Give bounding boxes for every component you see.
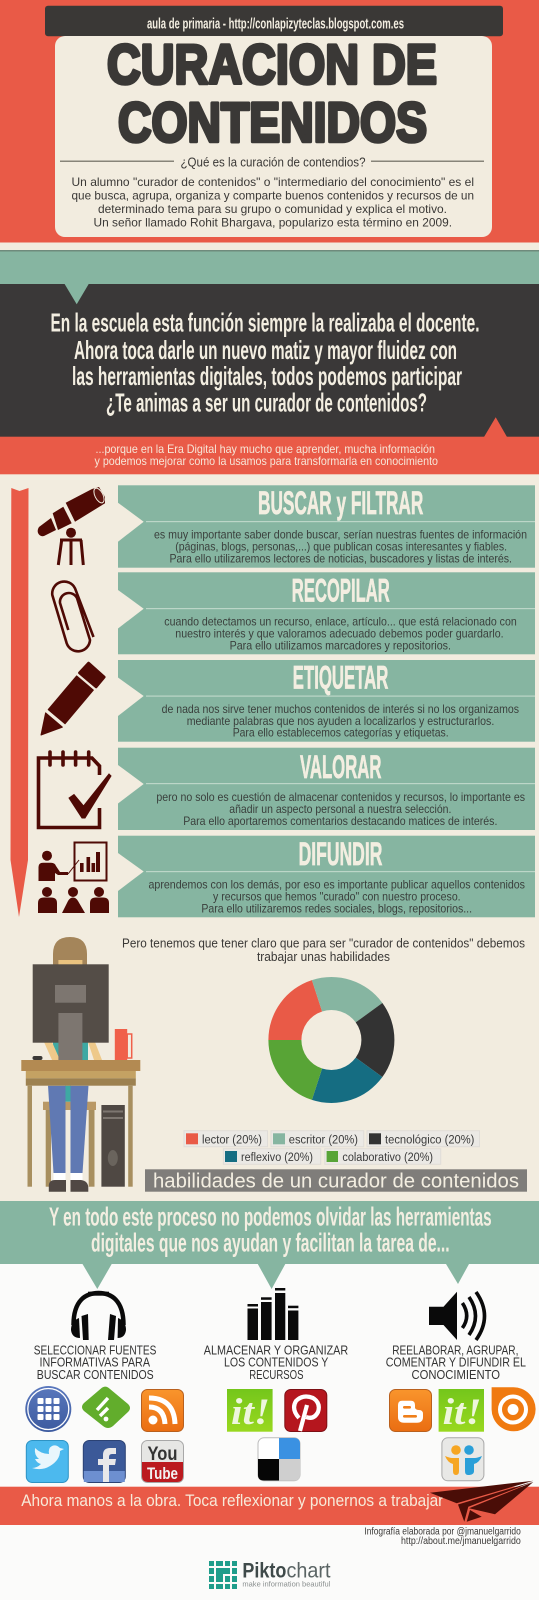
- panel: closing banner: [0, 1481, 539, 1525]
- caption: INFORMATIVAS PARA: [40, 1356, 151, 1370]
- definition text: determinado tema para su grupo o comunidad y explica el motivo.: [98, 202, 447, 216]
- caption: SELECCIONAR FUENTES: [34, 1343, 156, 1357]
- icon: paper plane: [430, 1481, 533, 1522]
- logo wordmark: Pikto: [242, 1559, 286, 1582]
- panel: buscar y filtrar: [118, 485, 535, 568]
- icon: slideshare: [442, 1438, 484, 1481]
- description: nuestro interés y que valoramos adecuado debemos poder guardarlo.: [175, 627, 504, 641]
- statement text: [50, 308, 479, 418]
- caption: ALMACENAR Y ORGANIZAR: [204, 1343, 348, 1357]
- column: select sources: [34, 1292, 156, 1382]
- hair: [53, 937, 87, 965]
- icon: scoop.it second: it!: [443, 1392, 482, 1433]
- panel: header: [0, 0, 539, 242]
- legend: escritor: [271, 1131, 364, 1147]
- heading: ETIQUETAR: [293, 660, 388, 696]
- icon: headphones: [71, 1292, 126, 1340]
- title: CURACION DE: [107, 32, 437, 95]
- panel: valorar: [118, 748, 535, 830]
- caption: BUSCAR CONTENIDOS: [37, 1368, 154, 1382]
- red pointer: [484, 417, 507, 437]
- piktochart logo: make information beautiful: [242, 1582, 331, 1589]
- logo mark: [209, 1561, 237, 1589]
- icon: calendar check: [38, 752, 111, 828]
- description: añadir un aspecto personal a nuestra selección.: [229, 802, 451, 816]
- description: [164, 615, 517, 653]
- icon: youtube: [142, 1440, 184, 1483]
- credits: http://about.me/jmanuelgarrido: [401, 1536, 521, 1547]
- description: [148, 878, 525, 916]
- panel: etiquetar: [118, 660, 535, 742]
- monitor: [33, 964, 109, 1043]
- icon: pencil: [41, 663, 104, 735]
- question heading: ¿Qué es la curación de contendios?: [180, 156, 366, 170]
- description: mediante palabras que nos ayuden a localizarlos y estructurarlos.: [187, 714, 494, 728]
- legend: tecnologico: [367, 1131, 480, 1147]
- title: [107, 32, 437, 154]
- digital era text: ...porque en la Era Digital hay mucho que aprender, mucha información: [96, 442, 435, 456]
- caption: [204, 1343, 348, 1382]
- column: store and organize: [204, 1288, 348, 1382]
- jeans: [48, 1086, 88, 1180]
- heading: DIFUNDIR: [299, 836, 382, 872]
- caption: [34, 1343, 156, 1382]
- description: [156, 790, 525, 828]
- definition text: [72, 175, 474, 229]
- icon: rss: [142, 1390, 184, 1432]
- caption: RECURSOS: [249, 1368, 304, 1382]
- description: y recursos que hemos "curado" con nuestro proceso.: [213, 890, 461, 904]
- icon: grid app: [25, 1386, 71, 1432]
- panel: school statement: [0, 284, 539, 437]
- chair seat and legs: [43, 1102, 96, 1187]
- source bar: [45, 6, 503, 36]
- icon: paperclip: [52, 582, 94, 651]
- icon: telescope: [38, 487, 106, 565]
- icon: youtube: You: [148, 1444, 178, 1465]
- chart caption: habilidades de un curador de contenidos: [153, 1169, 519, 1192]
- panel: tools section background: [0, 1201, 539, 1600]
- shirt and arms: [53, 1042, 88, 1060]
- legend: reflexivo: [223, 1149, 321, 1164]
- legend: lector: lector (20%): [202, 1134, 262, 1146]
- panel: recopilar: [118, 572, 535, 654]
- icon: speaker: [429, 1292, 484, 1340]
- caption: LOS CONTENIDOS Y: [224, 1356, 329, 1370]
- icon: books: [248, 1288, 298, 1340]
- legend: reflexivo: reflexivo (20%): [241, 1152, 313, 1164]
- icon: blogger: [390, 1390, 432, 1432]
- panel: digital era: [0, 417, 539, 474]
- legend: escritor: escritor (20%): [289, 1134, 358, 1146]
- banner text: [49, 1202, 492, 1258]
- credits: [364, 1526, 521, 1547]
- piktochart logo: [209, 1559, 331, 1589]
- caption: CONOCIMIENTO: [412, 1368, 500, 1382]
- definition text: que busca, agrupa, organiza y comparte buenos contenidos y recursos de un: [72, 188, 474, 202]
- definition text: Un alumno "curador de contenidos" o "intermediario del conocimiento" es el: [72, 175, 474, 189]
- icon: scoop.it: it!: [231, 1392, 270, 1433]
- intro to skills: trabajar unas habilidades: [257, 949, 390, 964]
- computer tower: [101, 1105, 125, 1187]
- donut chart: [268, 977, 394, 1103]
- icon: feedly: [82, 1387, 130, 1428]
- icon: delicious: [258, 1438, 300, 1481]
- description: [154, 527, 527, 565]
- icon: youtube: Tube: [147, 1464, 178, 1483]
- illustration: person at desk: [21, 937, 140, 1192]
- desk: [21, 1060, 140, 1187]
- mug: [115, 1029, 132, 1060]
- description: Para ello utilizaremos redes sociales, blogs, repositorios...: [201, 902, 472, 916]
- digital era text: y podemos mejorar como la usamos para transformarla en conocimiento: [94, 454, 438, 468]
- heading: RECOPILAR: [292, 572, 390, 608]
- description: Para ello utilizamos marcadores y repositorios.: [230, 639, 451, 653]
- description: Para ello establecemos categorías y etiquetas.: [233, 726, 449, 740]
- title: CONTENIDOS: [118, 90, 427, 154]
- description: [162, 702, 519, 740]
- icon: twitter: [26, 1440, 68, 1482]
- banner pointers: [82, 1264, 469, 1289]
- intro to skills: [122, 936, 525, 964]
- legend: lector: [184, 1131, 268, 1147]
- definition text: Un señor llamado Rohit Bhargava, popularizo esta término en 2009.: [94, 215, 452, 229]
- digital era text: [94, 442, 438, 468]
- legend: colaborativo: colaborativo (20%): [342, 1152, 433, 1164]
- piktochart logo: chart: [286, 1559, 331, 1582]
- legend: colaborativo: [325, 1149, 441, 1164]
- teal pointer: [65, 284, 89, 304]
- panel: teal strip: [0, 250, 539, 284]
- chart legend: [184, 1131, 480, 1164]
- mouse: [32, 1056, 42, 1060]
- description: Para ello aportaremos comentarios destacando matices de interés.: [183, 814, 497, 828]
- closing text: Ahora manos a la obra. Toca reflexionar y ponernos a trabajar: [21, 1491, 444, 1510]
- icon: pinterest: [285, 1390, 327, 1432]
- icon: facebook: [83, 1440, 125, 1482]
- icon: target: [492, 1387, 536, 1431]
- caption: [386, 1343, 526, 1382]
- shoes: [49, 1180, 66, 1192]
- column: rework and share: [386, 1292, 526, 1382]
- icon: presenter and audience: [38, 842, 109, 913]
- panel: difundir: [118, 836, 535, 917]
- legend: tecnologico: tecnológico (20%): [385, 1134, 475, 1146]
- panel: tools banner: [0, 1201, 539, 1289]
- heading: VALORAR: [300, 749, 381, 785]
- header card: [55, 36, 492, 237]
- timeline arrow: [10, 488, 28, 917]
